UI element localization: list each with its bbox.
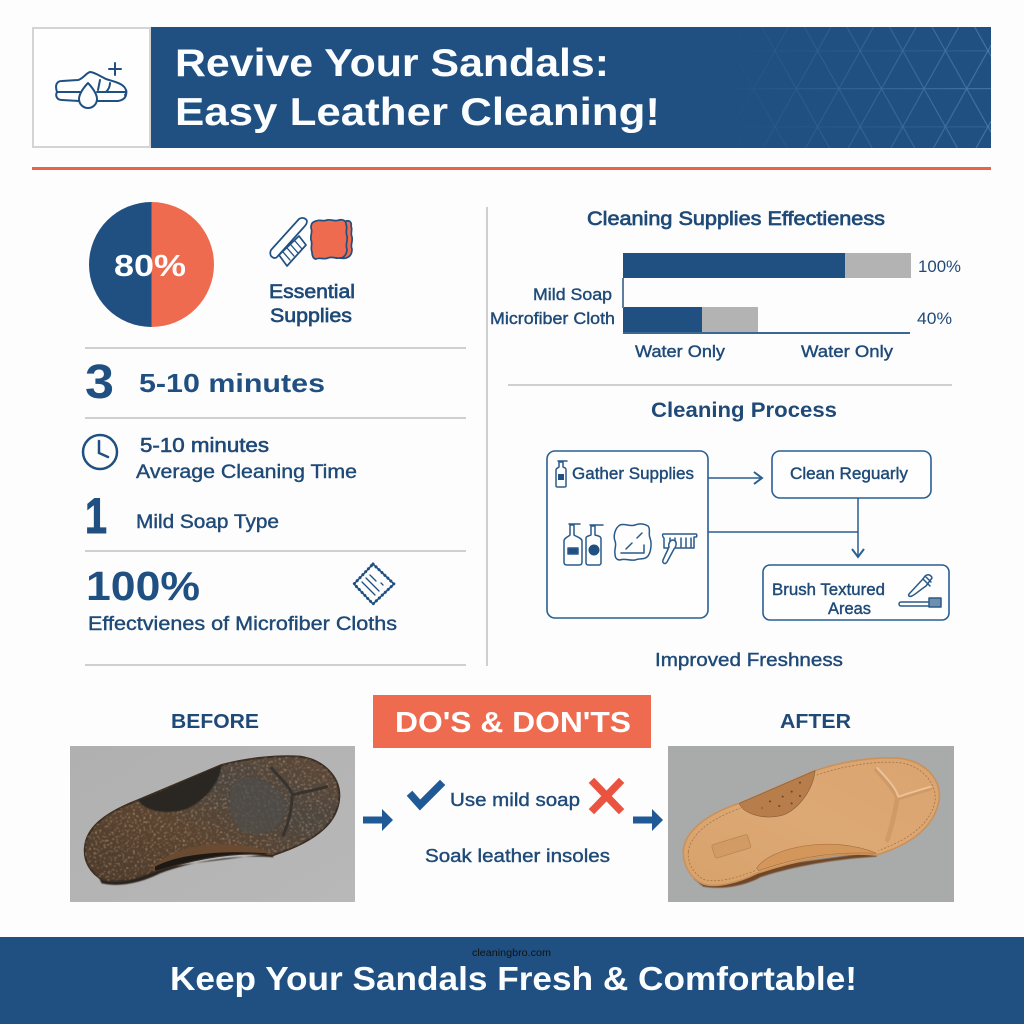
stat: 100%: 100%: [86, 563, 200, 609]
panel: cleaning process: [547, 399, 949, 670]
step: gather supplies: Gather Supplies: [572, 465, 694, 483]
label: essential supplies: [269, 282, 355, 327]
step: brush textured areas: Areas: [828, 600, 871, 618]
stat: 100%: Effectvienes of Microfiber Cloths: [88, 613, 397, 635]
step: clean regularly: [772, 451, 931, 498]
banner: do's and don'ts: DO'S & DON'TS: [395, 707, 631, 739]
arrow: to after: [633, 809, 663, 831]
chart labels: Water Only: [635, 342, 726, 361]
header banner: [33, 27, 991, 148]
chart heading: Cleaning Supplies Effectieness: [587, 208, 885, 230]
step: clean regularly: Clean Reguarly: [790, 465, 909, 483]
photo: dirty insole: [70, 746, 355, 902]
chart labels: Mild Soap: [533, 285, 612, 304]
pie chart: 80%: [89, 202, 214, 327]
photo: clean insole: [668, 746, 954, 902]
label: essential supplies: Supplies: [270, 306, 352, 327]
panel: bar chart: [490, 208, 961, 361]
bar: mild soap: [623, 253, 911, 278]
stat: 3: 5-10 minutes: [139, 368, 325, 398]
icon: check mark: [412, 785, 440, 805]
step: brush textured areas: [763, 565, 949, 620]
panel: before: [70, 711, 393, 902]
arrow: gather to clean: [708, 472, 762, 484]
icon: brush and cloth: [270, 218, 352, 266]
footer banner: [0, 937, 1024, 1024]
step: gather supplies: [547, 451, 708, 618]
icon: clock: [83, 435, 117, 469]
panel: after: [668, 711, 954, 902]
icon box: sandal with drop: [33, 28, 150, 147]
title: [175, 42, 660, 134]
panel: key stats: [83, 202, 466, 666]
icons: soap bottles, cloth, brush: [564, 524, 697, 565]
stat: 1: [85, 488, 279, 544]
outcome: improved freshness: Improved Freshness: [655, 650, 843, 670]
icon: cross mark: [594, 783, 619, 809]
banner: do's and don'ts: [373, 695, 651, 748]
pie chart: 80%: 80%: [114, 248, 186, 283]
source credit: cleaningbro.com: [472, 948, 551, 959]
stat: 100%: [86, 563, 397, 635]
before heading: BEFORE: [171, 711, 259, 733]
title: Easy Leather Cleaning!: [175, 91, 660, 134]
process heading: Cleaning Process: [651, 399, 837, 422]
stat: 1: 1: [85, 488, 107, 544]
chart labels: Water Only: [801, 342, 894, 361]
chart labels: 100%: [918, 257, 961, 276]
stat: 3: [85, 356, 325, 409]
bar: microfiber cloth: [623, 307, 758, 333]
arrow: before: [363, 809, 393, 831]
stat: 3: 3: [85, 356, 114, 409]
stat: cleaning time: Average Cleaning Time: [136, 461, 357, 483]
stat: cleaning time: [136, 435, 357, 483]
chart labels: [490, 257, 961, 361]
stat: 1: Mild Soap Type: [136, 512, 279, 533]
chart labels: Microfiber Cloth: [490, 309, 615, 328]
don't: soak leather insoles: Soak leather insoles: [425, 845, 610, 866]
stat: cleaning time: 5-10 minutes: [140, 435, 269, 457]
title: Revive Your Sandals:: [175, 42, 609, 85]
icon: microfiber cloth: [354, 564, 394, 604]
footer message: Keep Your Sandals Fresh & Comfortable!: [170, 960, 857, 997]
label: essential supplies: Essential: [269, 282, 355, 303]
arrow: to brush textured areas: [708, 498, 864, 557]
after heading: AFTER: [780, 711, 852, 733]
panel: do's and don'ts: [373, 695, 663, 866]
step: brush textured areas: Brush Textured: [772, 581, 885, 599]
chart labels: 40%: [917, 309, 952, 328]
header rule: [32, 167, 991, 170]
do: use mild soap: Use mild soap: [450, 789, 580, 810]
